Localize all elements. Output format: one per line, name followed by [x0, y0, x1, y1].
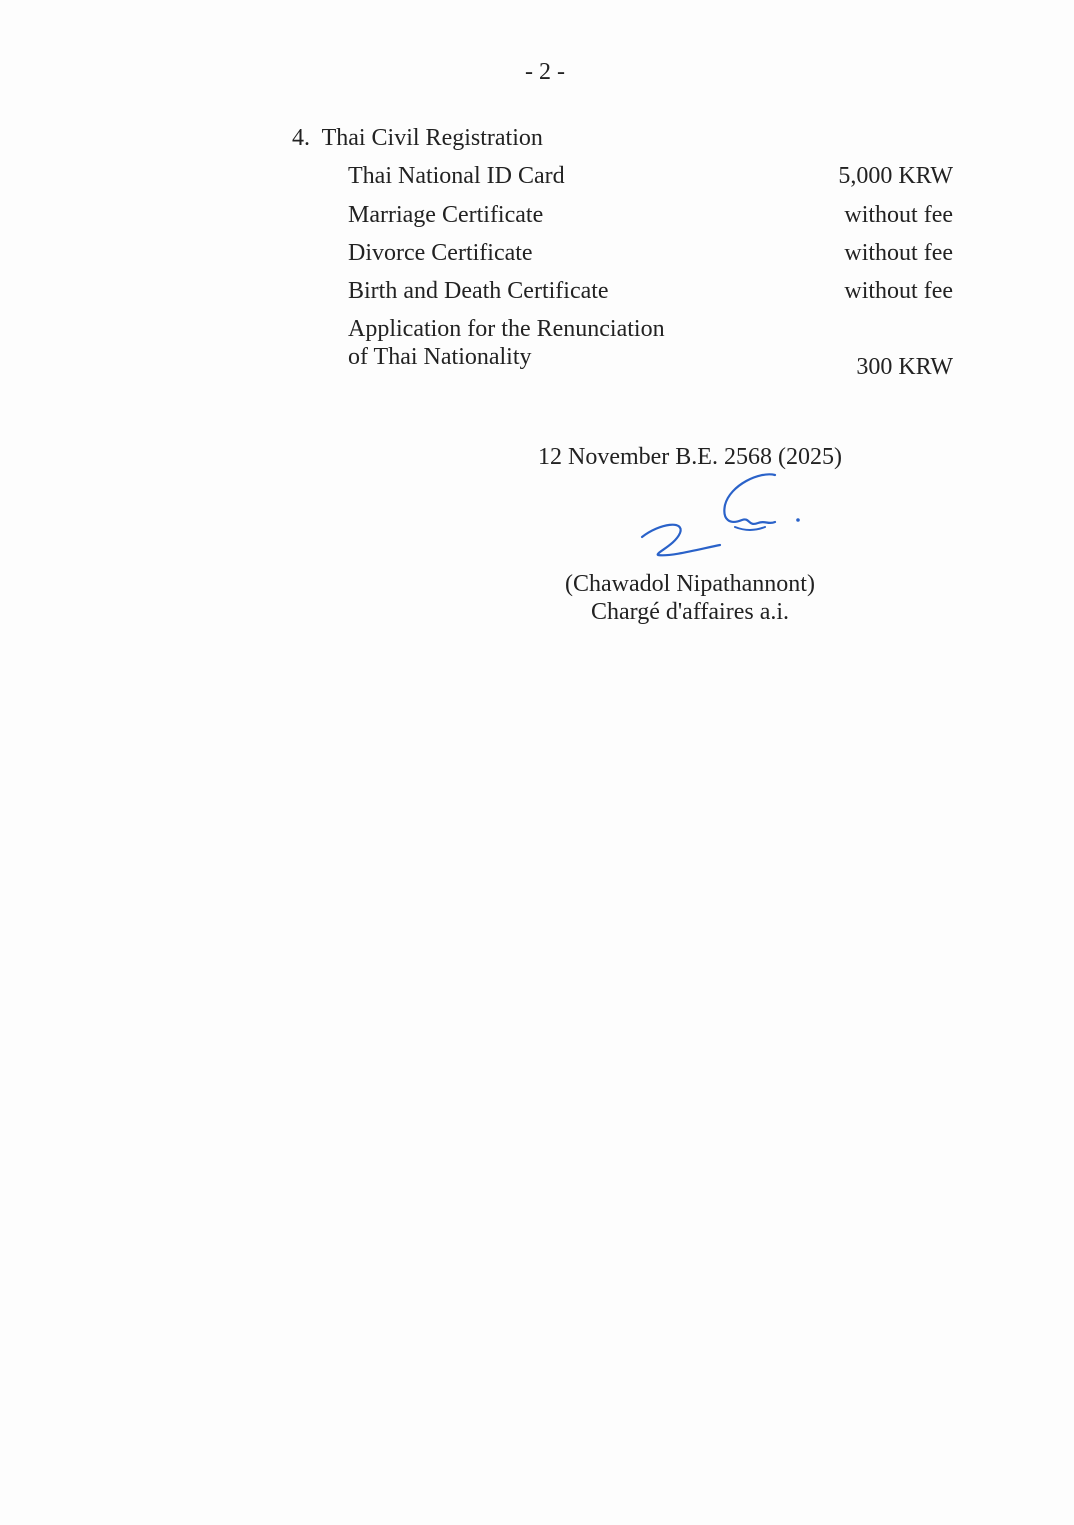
fee: 5,000 KRW: 5,000 KRW: [838, 163, 953, 189]
signatory name and title: Chargé d'affaires a.i.: [591, 599, 789, 625]
fee: without fee: without fee: [844, 202, 953, 228]
fee: 300 KRW: 300 KRW: [856, 354, 953, 380]
row: Marriage Certificate: Marriage Certificate: [348, 202, 543, 228]
page number: - 2 -: [525, 59, 565, 85]
fee: without fee: without fee: [844, 278, 953, 304]
row: Divorce Certificate: Divorce Certificate: [348, 240, 533, 266]
icon: signature: [640, 473, 800, 556]
row: Renunciation of Thai Nationality: Application for the Renunciation: [348, 316, 665, 342]
date: 12 November B.E. 2568 (2025): [538, 444, 842, 470]
row: Birth and Death Certificate: Birth and Death Certificate: [348, 278, 609, 304]
signatory name and title: [565, 571, 815, 625]
signatory name and title: (Chawadol Nipathannont): [565, 571, 815, 597]
row: Thai National ID Card: Thai National ID Card: [348, 163, 565, 189]
row: Renunciation of Thai Nationality: [348, 316, 665, 370]
row: Renunciation of Thai Nationality: of Thai Nationality: [348, 344, 532, 370]
fee: without fee: without fee: [844, 240, 953, 266]
section heading: Thai Civil Registration: 4. Thai Civil Registration: [292, 125, 543, 151]
fee table: [348, 163, 953, 380]
